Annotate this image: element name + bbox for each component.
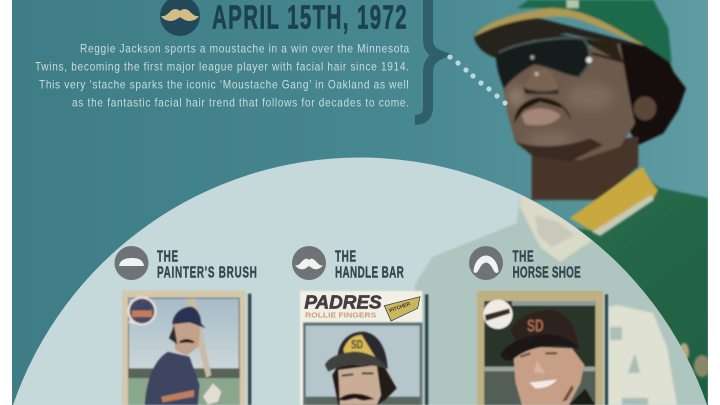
text block: description: Twins, becoming the first major league player with facial hair since 1914.	[35, 61, 409, 74]
hands	[203, 383, 221, 404]
icon: painter's brush moustache	[114, 246, 148, 280]
baseball card: Padres smiling player	[477, 291, 608, 405]
card player name: ROLLIE FINGERS	[305, 312, 377, 319]
neck	[532, 137, 638, 200]
eyes	[520, 353, 557, 357]
baseball card: Padres	[300, 291, 428, 405]
moustache	[338, 394, 374, 401]
logo	[127, 296, 157, 326]
icon: handle bar moustache	[292, 246, 326, 280]
hat button highlight	[567, 0, 579, 8]
brim top	[474, 8, 645, 46]
collar	[570, 167, 658, 236]
faded jersey letter	[608, 305, 677, 405]
hair	[617, 42, 686, 145]
brim underside	[474, 17, 645, 59]
column: the horse shoe	[469, 246, 608, 405]
icon: moustache badge	[160, 0, 200, 36]
text block: description: This very ‘stache sparks the iconic ‘Moustache Gang’ in Oakland as well	[39, 79, 409, 92]
label	[157, 247, 257, 281]
column: the handle bar	[292, 246, 428, 405]
logo	[483, 300, 513, 329]
label: THE	[512, 247, 534, 265]
face	[498, 43, 635, 160]
faded collar	[520, 190, 593, 262]
ear	[634, 96, 656, 120]
sunglasses	[496, 37, 591, 89]
label: HANDLE BAR	[335, 263, 404, 281]
label: THE	[335, 247, 356, 265]
photo: Reggie Jackson	[472, 0, 708, 405]
smile	[529, 379, 557, 388]
text block: description: Reggie Jackson sports a moustache in a win over the Minnesota	[80, 43, 410, 56]
baseball card: Padres: SD	[351, 337, 363, 351]
face	[172, 320, 201, 356]
cheek highlights	[567, 83, 613, 110]
face	[338, 365, 381, 405]
light circle panel	[13, 157, 707, 405]
label: PAINTER'S BRUSH	[157, 263, 257, 281]
card team name: PADRES	[304, 291, 382, 312]
lips	[522, 108, 561, 125]
nose	[534, 360, 545, 373]
cap	[510, 310, 579, 348]
baseball card: Padres smiling player: SD	[527, 316, 544, 336]
hat crown	[517, 0, 672, 63]
icon: horse shoe moustache	[469, 246, 503, 280]
label	[512, 247, 581, 281]
chin shadow	[515, 138, 603, 162]
hair	[332, 365, 397, 405]
bat	[186, 298, 211, 378]
dotted connector	[447, 54, 508, 106]
sideburn	[562, 385, 574, 402]
jersey shoulder	[569, 388, 595, 405]
column: the painter's brush	[114, 246, 257, 405]
label	[335, 247, 404, 281]
jersey	[576, 181, 708, 405]
tan patch and button on jersey	[679, 343, 710, 377]
nose	[525, 69, 558, 90]
label: THE	[157, 247, 178, 265]
fence	[484, 367, 595, 405]
eyes	[342, 373, 373, 376]
label: HORSE SHOE	[512, 263, 581, 281]
sky strip	[512, 301, 595, 306]
body	[145, 352, 200, 405]
pennant: PITCHER	[389, 301, 412, 314]
text block: description: as the fantastic facial hair trend that follows for decades to come.	[72, 97, 409, 110]
baseball card: Mets	[122, 290, 251, 405]
moustache	[180, 340, 194, 342]
header group	[35, 0, 508, 120]
moustache	[514, 97, 572, 123]
brace	[415, 0, 439, 120]
forehead shadow	[524, 32, 624, 61]
face	[514, 347, 584, 405]
cap	[172, 307, 206, 328]
cap	[338, 332, 388, 368]
text block: description	[35, 43, 410, 110]
faded jersey seen through circle	[415, 190, 708, 405]
